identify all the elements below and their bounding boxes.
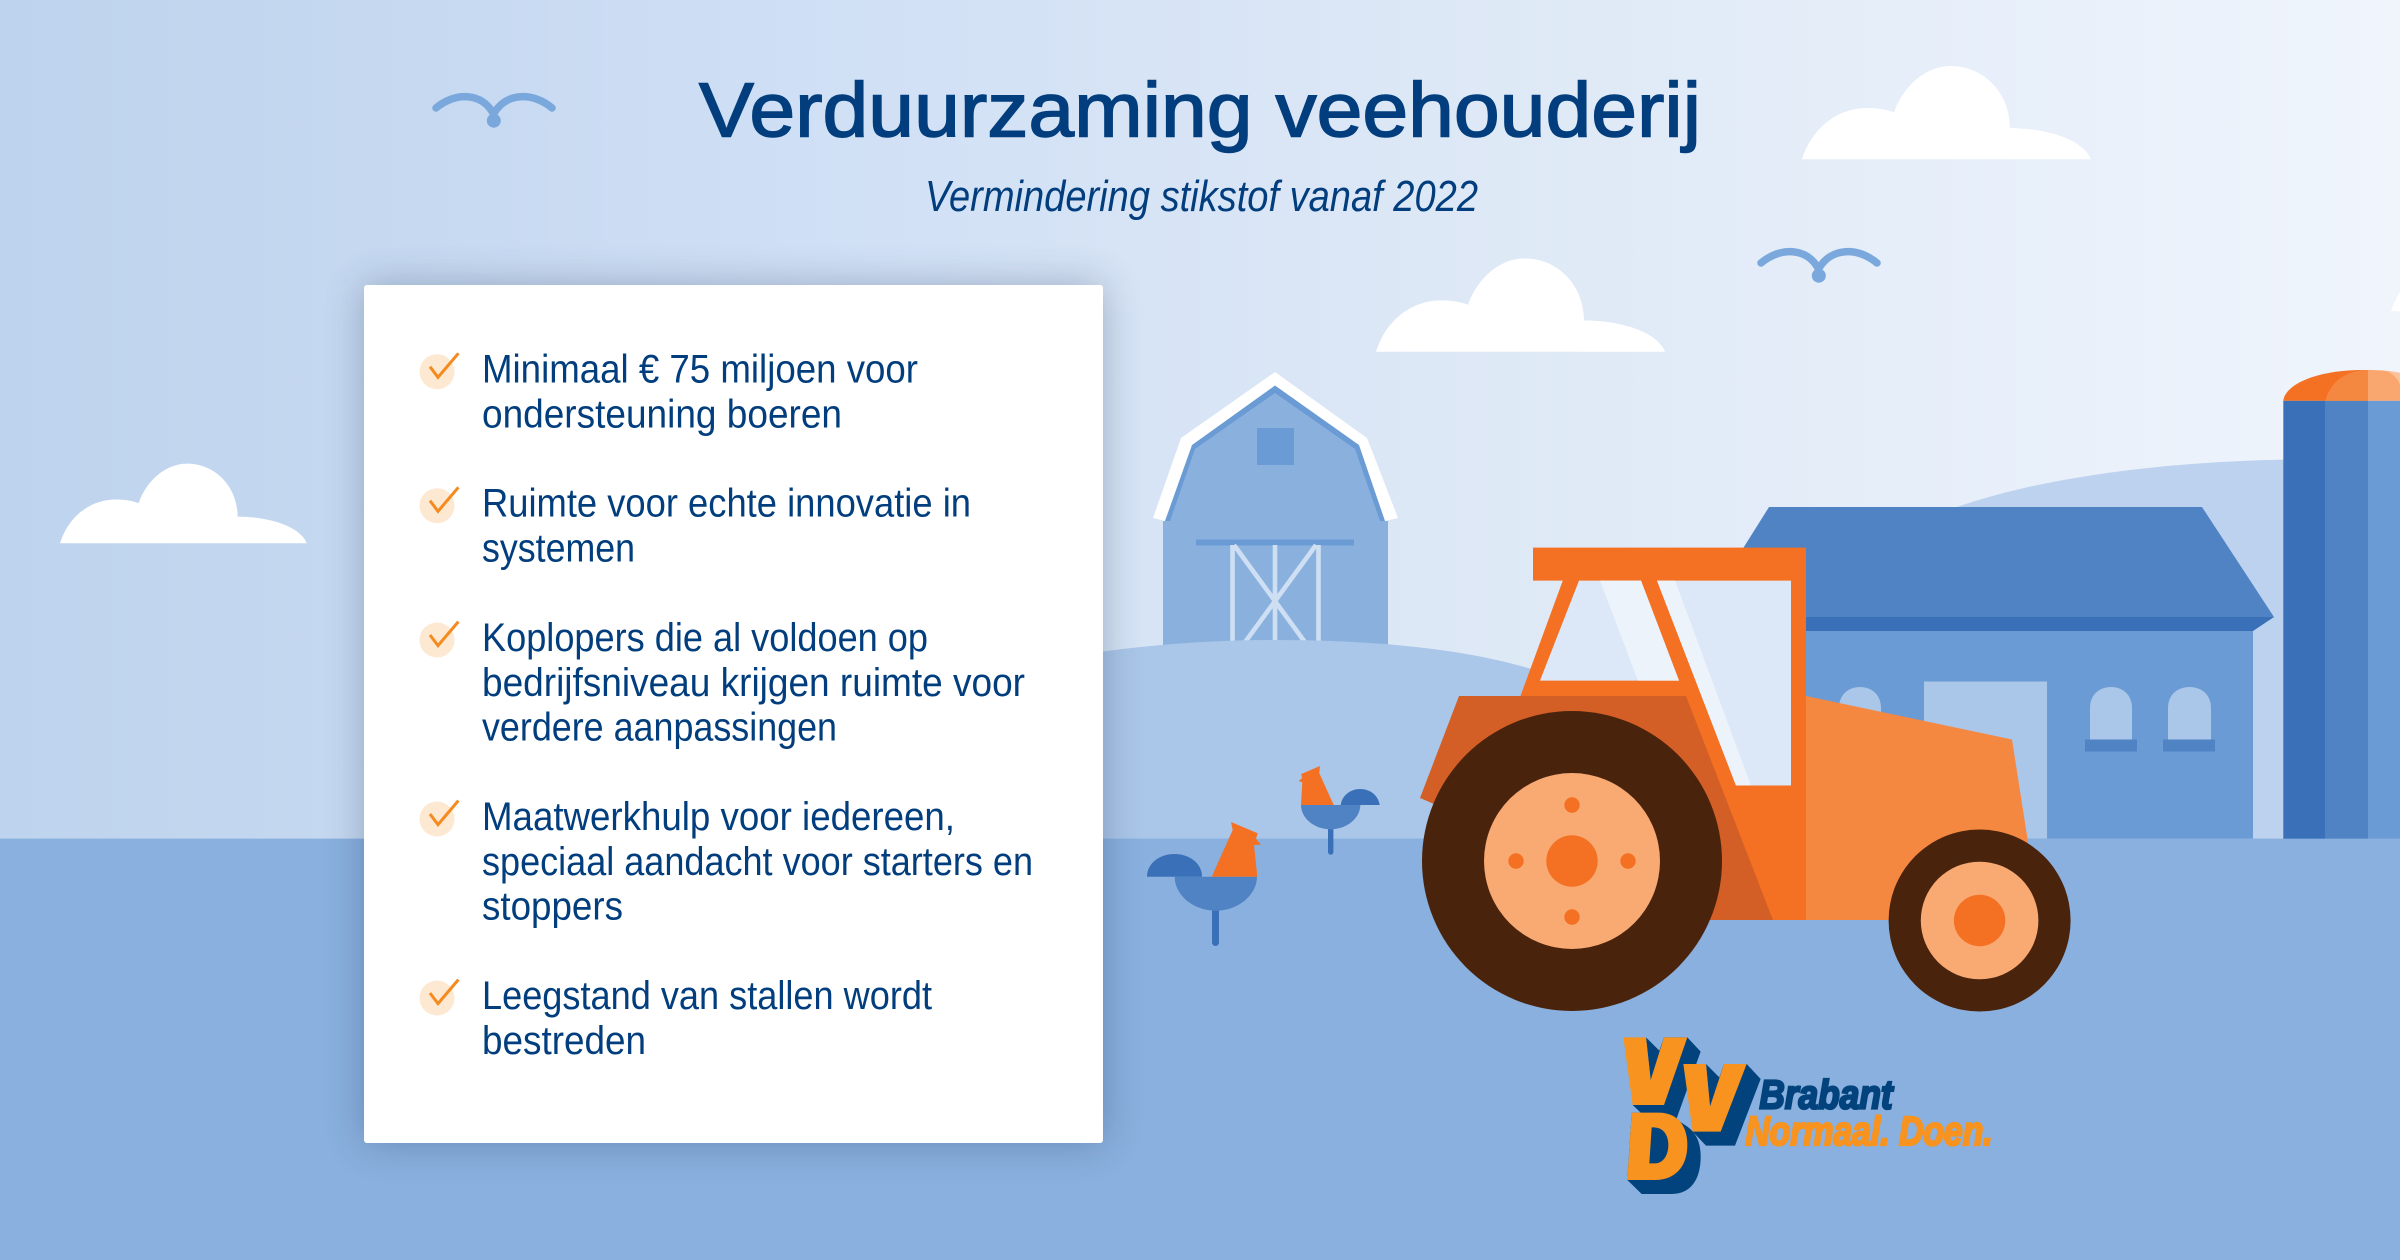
barn [1153, 372, 1398, 660]
barn door lintel [1196, 540, 1354, 546]
panel: card shadow [364, 285, 1103, 1143]
chicken: small [1299, 766, 1380, 855]
shed window 1 [1839, 687, 1881, 745]
title: Verduurzaming veehouderij [699, 68, 1701, 154]
check item 1 [420, 348, 918, 436]
panel: measures [364, 285, 1103, 1143]
rear window [1657, 581, 1791, 786]
check item 5: Leegstand van stallen wordt [482, 974, 932, 1018]
check item 3: bedrijfsniveau krijgen ruimte voor [482, 661, 1025, 705]
logo D [1627, 1113, 1701, 1194]
front wheel [1889, 830, 2071, 1012]
shed roof [1700, 507, 2274, 617]
check item 3: Koplopers die al voldoen op [482, 616, 928, 660]
shed roof edge [1700, 617, 2274, 631]
check item 4: stoppers [482, 885, 623, 929]
shed door [1924, 682, 2047, 838]
barn roof trim [1153, 372, 1398, 521]
rear wheel [1422, 711, 1722, 1011]
check item 3: verdere aanpassingen [482, 706, 837, 750]
silo [2283, 370, 2400, 839]
shed window 2 [2090, 687, 2132, 740]
shed [1700, 507, 2274, 839]
subtitle: Vermindering stikstof vanaf 2022 [925, 172, 1478, 221]
cloud: centre [1376, 258, 1665, 352]
check item 4: speciaal aandacht voor starters en [482, 840, 1033, 884]
cloud: left [60, 464, 307, 543]
cloud: right edge [2391, 218, 2400, 311]
logo second V [1683, 1064, 1761, 1146]
cloud: top right [1802, 66, 2091, 159]
logo first V [1623, 1037, 1701, 1118]
shed wall [1700, 631, 2253, 839]
hill: left [800, 640, 1750, 840]
check item 4: Maatwerkhulp voor iedereen, [482, 795, 955, 839]
tractor hood [1806, 696, 2030, 920]
check item 1: ondersteuning boeren [482, 392, 842, 436]
check item 2 [420, 482, 971, 570]
barn loft window [1257, 428, 1294, 465]
chicken: large [1147, 822, 1261, 946]
check item 2: Ruimte voor echte innovatie in [482, 482, 971, 526]
window sill 2 [2085, 740, 2137, 752]
barn body [1163, 393, 1388, 660]
check item 5: bestreden [482, 1019, 646, 1063]
check item 2: systemen [482, 526, 635, 570]
bird: right [1761, 252, 1877, 283]
tractor cab roof [1533, 548, 1806, 581]
tractor fender [1420, 696, 1773, 920]
logo: VVD Brabant [1623, 1037, 1993, 1194]
check item 4 [420, 795, 1033, 929]
logo text Brabant: Brabant [1759, 1072, 1894, 1118]
window sill 3 [2163, 740, 2215, 752]
shed window 3 [2168, 687, 2211, 740]
check item 5 [420, 974, 932, 1063]
bird: left [436, 97, 552, 128]
ground [0, 839, 2400, 1260]
front window [1540, 581, 1679, 681]
tractor cab frame [1519, 580, 1806, 920]
hill: right [1957, 457, 2400, 840]
check item 3 [420, 616, 1025, 750]
barn door [1232, 545, 1318, 660]
logo text slogan: Normaal. Doen. [1745, 1108, 1993, 1154]
sky background [0, 0, 2400, 840]
tractor [1420, 548, 2071, 1012]
check item 1: Minimaal € 75 miljoen voor [482, 348, 918, 392]
silo dome [2283, 370, 2368, 401]
